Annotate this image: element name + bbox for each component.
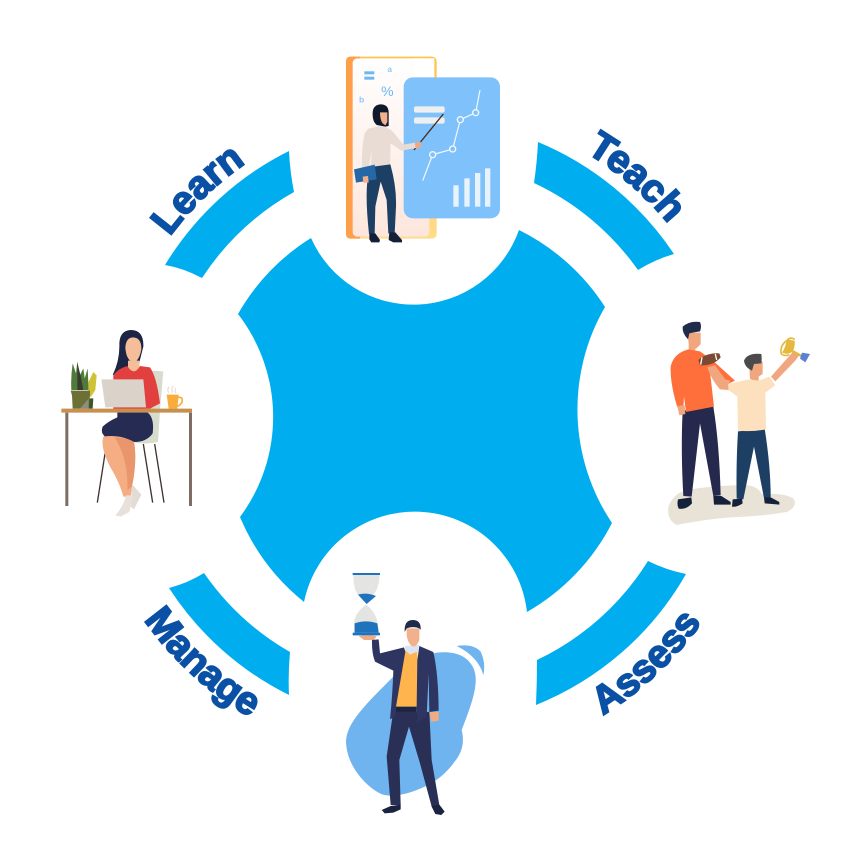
- label: Assess: Assess: [596, 613, 700, 716]
- arc segment: Manage: [169, 573, 290, 695]
- label: Manage: Manage: [144, 604, 258, 715]
- central blue shape: [238, 230, 612, 612]
- arc segment: Learn: [165, 151, 294, 278]
- illustration: teacher presenting a chart: a: [387, 65, 392, 74]
- illustration: businessman holding an hourglass: [346, 573, 484, 815]
- arc segment: Teach: [534, 142, 674, 270]
- arc segment: Assess: [536, 561, 686, 705]
- label: Teach: Teach: [592, 128, 681, 224]
- illustration: teacher presenting a chart: [346, 57, 500, 242]
- illustration: woman working at a laptop: [61, 330, 192, 517]
- illustration: father and son with trophy: [668, 322, 810, 525]
- illustration: teacher presenting a chart: b: [359, 94, 364, 104]
- label: Learn: Learn: [149, 149, 245, 236]
- illustration: teacher presenting a chart: %: [381, 83, 394, 99]
